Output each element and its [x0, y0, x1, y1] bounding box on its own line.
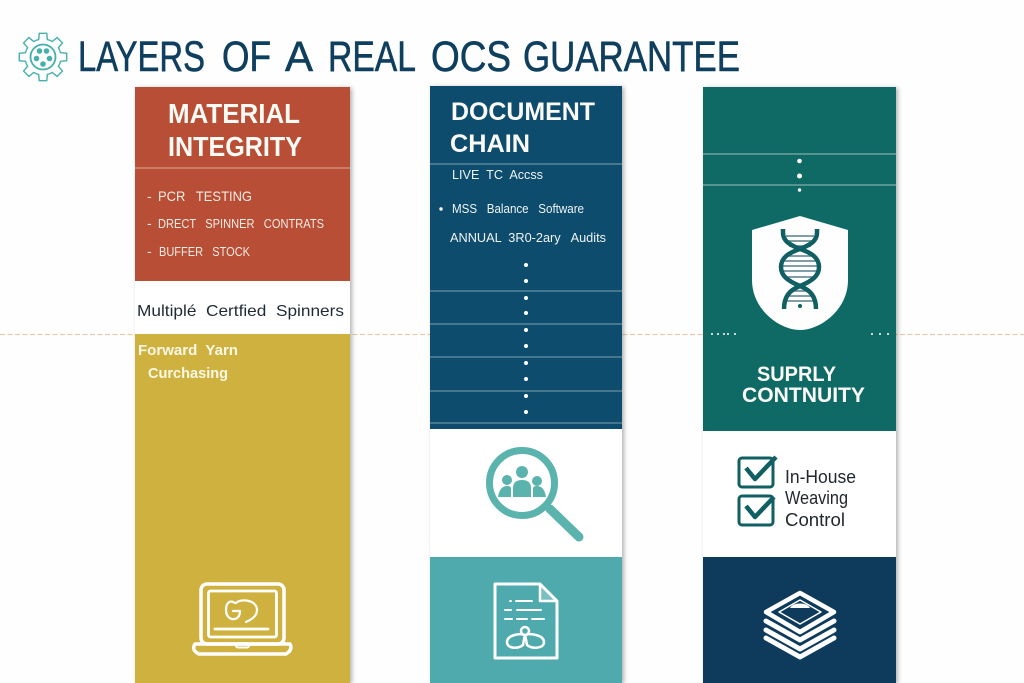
title: REAL [328, 34, 416, 81]
panel: material integrity header [135, 87, 350, 683]
column: document chain [430, 86, 622, 683]
text: in-house weaving control [785, 467, 856, 530]
icon: magnifier with people [490, 450, 579, 537]
heading: material integrity [168, 98, 302, 162]
text block: material list: DRECT SPINNER CONTRATS [158, 217, 324, 231]
icon: DNA shield [752, 216, 848, 330]
panel: supply continuity body [703, 87, 896, 683]
dashed line fragments [711, 333, 889, 335]
heading: document chain [450, 98, 595, 158]
title: A [285, 34, 314, 81]
heading: material integrity: MATERIAL [168, 98, 300, 129]
dotted leader [524, 263, 528, 414]
text block: material list: BUFFER STOCK [159, 244, 250, 259]
dotted leader [797, 159, 802, 192]
text block: document list: ANNUAL 3R0-2ary Audits [450, 230, 606, 245]
column: supply continuity [703, 87, 896, 683]
heading: supply continuity: CONTNUITY [742, 384, 865, 407]
text block: material list: PCR TESTING [158, 188, 252, 204]
text: forward yarn purchasing [138, 342, 238, 382]
title: LAYERS [78, 34, 205, 81]
icon: laptop [194, 584, 291, 654]
icon: document [495, 584, 557, 658]
icon: checkboxes [739, 457, 776, 525]
icon: stacked layers [766, 593, 834, 657]
text block: material list: - [147, 243, 152, 259]
heading: supply continuity [742, 363, 865, 407]
heading: document chain: DOCUMENT [451, 98, 595, 126]
text block: document list: MSS Balance Software [452, 201, 584, 216]
title [78, 34, 740, 81]
title: OF [222, 34, 271, 81]
text block: document list: LIVE TC Accss [452, 167, 543, 182]
heading: document chain: CHAIN [450, 130, 530, 158]
text: in-house weaving control: In-House [785, 467, 856, 487]
text block: document list [439, 167, 606, 245]
text: multiple certified spinners: Multiplé Certfied Spinners [137, 303, 344, 320]
text block: material list [147, 188, 324, 259]
text block: material list: - [147, 188, 152, 204]
text: in-house weaving control: Control [785, 510, 845, 530]
column: material integrity [135, 87, 350, 683]
heading: supply continuity: SUPRLY [757, 363, 836, 386]
text: in-house weaving control: Weaving [785, 488, 848, 508]
text: forward yarn purchasing: Curchasing [148, 365, 228, 382]
title: GUARANTEE [523, 34, 740, 81]
panel: document chain body [430, 86, 622, 683]
title: OCS [431, 34, 511, 81]
icon: gear [19, 33, 67, 81]
heading: material integrity: INTEGRITY [168, 131, 302, 162]
text block: material list: - [147, 215, 152, 231]
text: forward yarn purchasing: Forward Yarn [138, 342, 238, 359]
